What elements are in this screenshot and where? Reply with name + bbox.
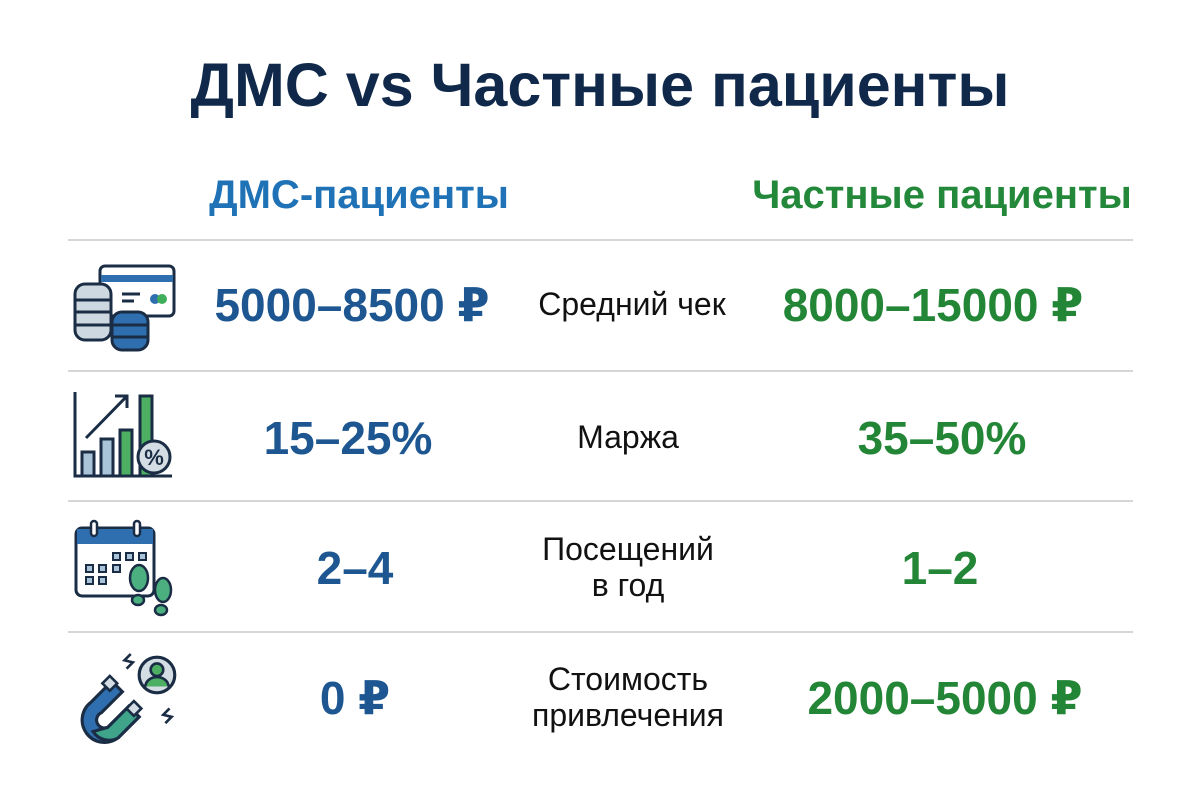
icon: chart with percent <box>74 392 172 478</box>
row3 label: Посещений <box>542 531 714 567</box>
row1 DMS value: 5000–8500 ₽ <box>214 279 490 331</box>
icon: calendar with footprints <box>74 520 172 616</box>
icon: card and coins <box>74 264 176 352</box>
row1 label: Средний чек <box>538 286 726 322</box>
header: DMS: ДМС-пациенты <box>209 173 509 217</box>
row3 label <box>542 531 714 603</box>
row4 DMS value: 0 ₽ <box>320 672 390 724</box>
title: ДМС vs Частные пациенты <box>191 51 1009 119</box>
row4 label: Стоимость <box>548 661 708 697</box>
row4 label <box>532 661 724 733</box>
row3 label: в год <box>592 567 664 603</box>
row2 label: Маржа <box>577 419 679 455</box>
header: private: Частные пациенты <box>752 173 1132 217</box>
row4 label: привлечения <box>532 697 724 733</box>
icon: magnet with person <box>80 653 176 744</box>
row3 DMS value: 2–4 <box>317 542 393 594</box>
row2 private value: 35–50% <box>858 412 1026 464</box>
icon: chart with percent: % <box>144 445 164 470</box>
row2 DMS value: 15–25% <box>264 412 432 464</box>
row3 private value: 1–2 <box>902 542 978 594</box>
row1 private value: 8000–15000 ₽ <box>783 279 1083 331</box>
row4 private value: 2000–5000 ₽ <box>807 672 1083 724</box>
